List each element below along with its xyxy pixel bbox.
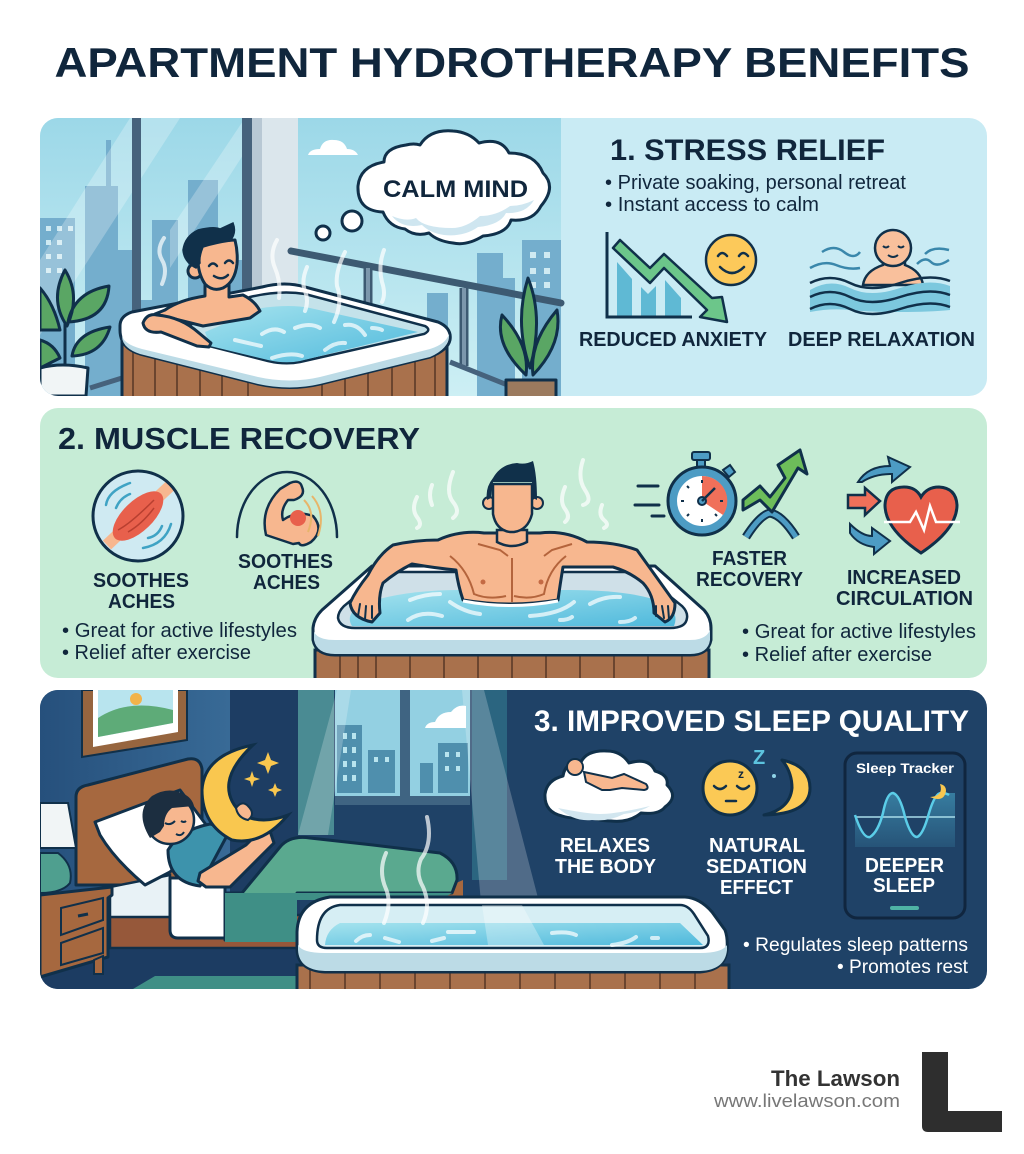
bullet list: sleep: • Promotes rest: [837, 957, 969, 978]
heading: stress relief: 1. STRESS RELIEF: [610, 134, 885, 167]
bullet list: stress relief: • Private soaking, personal retreat: [605, 172, 906, 194]
headboard: [76, 759, 202, 885]
hot tub: [120, 284, 450, 400]
sleep tracker card: DEEPER: [865, 855, 945, 877]
footer brand text: www.livelawson.com: [713, 1091, 900, 1111]
icon: reduced anxiety chart: [607, 232, 756, 322]
blanket: [225, 837, 457, 940]
bullet list: right: • Great for active lifestyles: [742, 621, 976, 643]
man: [168, 824, 230, 886]
window: [335, 690, 470, 796]
panel: stress relief: [40, 118, 987, 403]
label: natural sedation effect: SEDATION: [706, 856, 807, 878]
man and tub: [313, 460, 711, 680]
icon: sleeping face and moon: Z: [753, 747, 765, 769]
left plant: [40, 270, 110, 396]
label: relaxes the body: RELAXES: [560, 835, 650, 857]
heading: sleep quality: 3. IMPROVED SLEEP QUALITY: [534, 705, 969, 738]
bed: [110, 914, 300, 950]
label: soothes aches 2: [238, 554, 332, 589]
bullet list: sleep: • Regulates sleep patterns: [743, 935, 968, 956]
label: increased circulation: INCREASED: [847, 567, 961, 589]
label: soothes aches 1: ACHES: [108, 591, 175, 613]
footer brand text: [713, 1066, 900, 1111]
icon: stopwatch: [635, 452, 736, 535]
label: faster recovery: [697, 551, 803, 586]
label: soothes aches 1: SOOTHES: [93, 570, 189, 592]
balcony illustration: [40, 118, 561, 403]
bullet list: left: [62, 622, 296, 659]
railing: [291, 251, 561, 303]
icon: cloud with person: [545, 751, 673, 821]
panel: sleep quality: [40, 690, 987, 995]
bullet list: right: [742, 623, 976, 661]
lamp: [40, 803, 76, 848]
label: natural sedation effect: NATURAL: [709, 835, 805, 857]
thought bubble: CALM MIND: [383, 176, 528, 203]
label: soothes aches 2: ACHES: [253, 572, 320, 594]
label: natural sedation effect: [706, 835, 807, 899]
label: soothes aches 1: [94, 573, 188, 608]
sleep tracker card: [845, 753, 965, 918]
label: soothes aches 2: SOOTHES: [238, 551, 333, 573]
panel: muscle recovery: [40, 408, 987, 680]
man in tub: [143, 223, 260, 347]
nightstand: [40, 887, 112, 977]
icon: heart and circulation arrows: [848, 457, 960, 554]
steam: [159, 238, 384, 322]
sleep tracker card: Sleep Tracker: [856, 761, 955, 776]
label: reduced anxiety: REDUCED ANXIETY: [579, 329, 768, 351]
right plant: [500, 278, 558, 400]
icon: sleeping face and moon: z: [738, 767, 744, 781]
label: relaxes the body: [555, 835, 657, 878]
bullet list: right: • Relief after exercise: [742, 644, 932, 666]
label: deep relaxation: DEEP RELAXATION: [788, 329, 975, 351]
pillow: [95, 790, 210, 885]
picture: [82, 690, 187, 757]
bedroom illustration: [40, 690, 545, 989]
heading: muscle recovery: 2. MUSCLE RECOVERY: [58, 421, 420, 456]
icon: muscle: [93, 471, 183, 561]
bullet list: sleep: [743, 935, 969, 978]
sleep tracker card: SLEEP: [873, 875, 935, 897]
thought bubble: [316, 131, 550, 244]
label: faster recovery: FASTER: [712, 548, 788, 570]
icon: deep relaxation: [810, 230, 950, 314]
icon: upward arrow: [743, 450, 807, 537]
label: increased circulation: [836, 570, 972, 605]
icon: sleeping face and moon: [703, 747, 810, 815]
bullet list: left: • Relief after exercise: [62, 642, 251, 664]
icon: flexed arm: [237, 472, 337, 545]
label: relaxes the body: THE BODY: [555, 856, 657, 878]
label: increased circulation: CIRCULATION: [836, 588, 973, 610]
title: APARTMENT HYDROTHERAPY BENEFITS: [54, 39, 970, 86]
footer brand text: The Lawson: [771, 1066, 900, 1091]
bullet list: stress relief: • Instant access to calm: [605, 194, 819, 216]
bath tub: [297, 817, 729, 995]
moon: [202, 745, 288, 841]
logo: L mark: [922, 1052, 1002, 1132]
bullet list: left: • Great for active lifestyles: [62, 620, 297, 642]
label: faster recovery: RECOVERY: [696, 569, 804, 591]
label: natural sedation effect: EFFECT: [720, 877, 793, 899]
bullet list: stress relief: [606, 174, 906, 211]
